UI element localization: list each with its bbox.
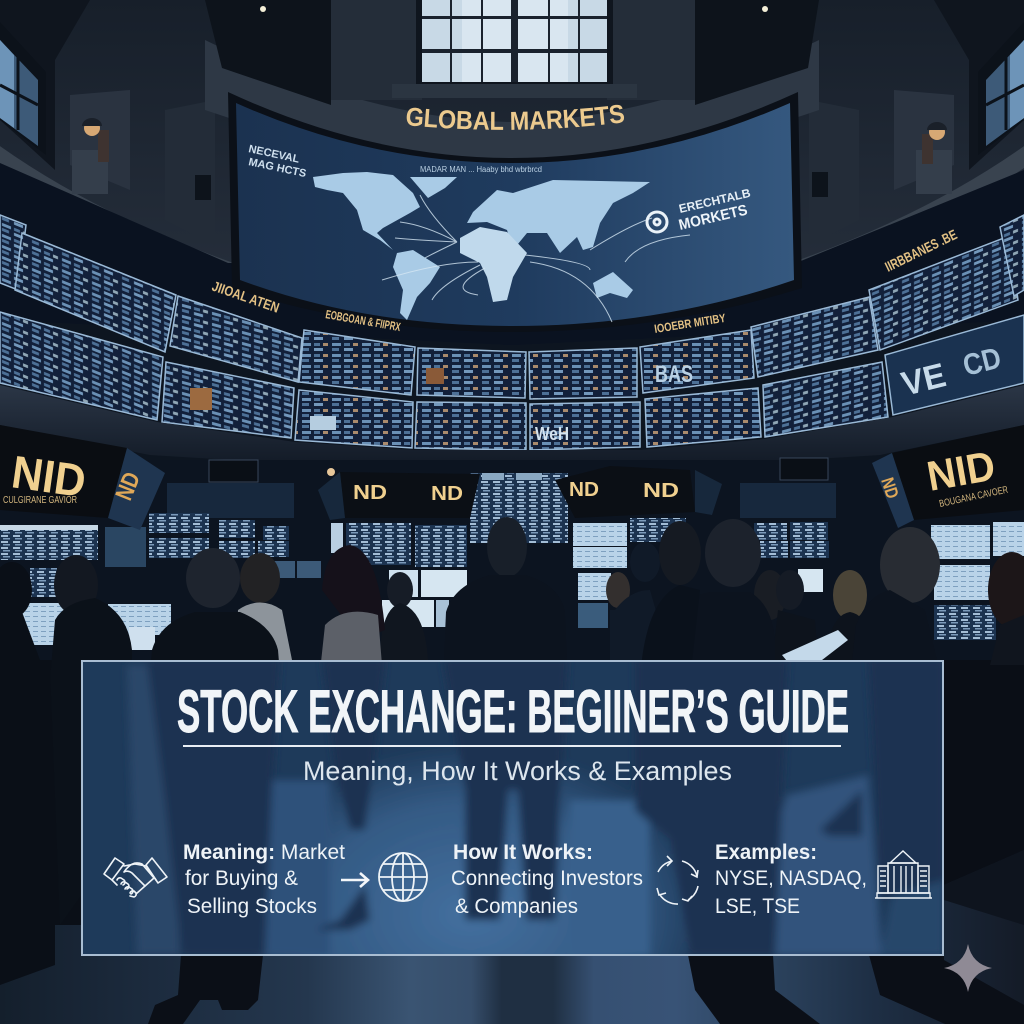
back wall panels xyxy=(167,483,836,518)
map connection lines xyxy=(382,195,690,322)
text: examples: LSE, TSE xyxy=(715,895,800,918)
screen label left 2: MAG HCTS xyxy=(247,156,307,180)
trading monitors wall xyxy=(0,473,1024,650)
side windows right xyxy=(978,22,1024,155)
hanging sign cluster left: ND xyxy=(431,483,463,505)
text: how it works xyxy=(451,841,643,918)
person: left man facing left xyxy=(50,555,132,925)
ticker board upper row xyxy=(0,215,1024,399)
wall lamp left xyxy=(72,118,109,194)
lit floor within panel xyxy=(128,664,942,954)
text: examples: Examples: xyxy=(715,841,817,864)
text: how it works: How It Works: xyxy=(453,841,593,864)
large sign right xyxy=(872,425,1024,528)
text: how it works: Connecting Investors xyxy=(451,867,643,890)
board labels in gold: JIIOAL ATEN xyxy=(210,278,281,316)
wall lamp right xyxy=(916,122,952,194)
large sign left: NID xyxy=(9,445,89,507)
map continents xyxy=(313,172,650,320)
text: meaning: for Buying & xyxy=(185,867,298,890)
back row people xyxy=(236,542,875,680)
ticker board lower row xyxy=(0,312,1024,450)
screen label right 2: MORKETS xyxy=(677,202,749,234)
soffit below boards xyxy=(0,385,1024,466)
text: how it works: & Companies xyxy=(455,895,578,918)
icon: globe xyxy=(379,853,427,901)
hanging sign cluster right: ND xyxy=(569,479,599,501)
person: man beside right man xyxy=(640,521,701,680)
legs and feet below panel xyxy=(148,955,1024,1024)
board labels in gold: IOOEBR MITIBY xyxy=(653,311,727,336)
speaker right xyxy=(812,172,828,197)
heading: global markets sign: GLOBAL MARKETS xyxy=(406,104,624,130)
hanging sign cluster left xyxy=(318,472,480,520)
skylight window xyxy=(392,0,637,98)
hanging sign cluster right xyxy=(555,466,722,518)
board logos: WeH xyxy=(535,424,569,444)
balcony right xyxy=(695,0,819,105)
title rule xyxy=(183,745,841,747)
board labels in gold: IIRBBANES .BE xyxy=(882,226,959,275)
person: woman in grey jacket xyxy=(318,545,385,690)
person: centre man back view xyxy=(443,517,568,680)
person: right man with glasses xyxy=(850,527,942,680)
hanging dark TVs xyxy=(209,458,828,482)
large sign right: ND xyxy=(877,475,902,501)
large sign left: ND xyxy=(110,468,146,504)
floor xyxy=(0,700,1024,1024)
arrow xyxy=(341,873,368,887)
icon: cycle xyxy=(657,856,698,904)
large sign left: CULGIRANE GAVIOR xyxy=(3,495,77,506)
speaker left xyxy=(195,175,211,200)
icon: sparkle watermark xyxy=(944,944,992,992)
text: examples: NYSE, NASDAQ, xyxy=(715,867,867,890)
board logos: BAS xyxy=(655,361,693,388)
screen label left: NECEVAL xyxy=(247,143,301,166)
right desk and figures (dark mass right of panel) xyxy=(944,552,1024,925)
text: meaning: Meaning: Market xyxy=(183,841,345,864)
panel: title overlay xyxy=(81,660,944,956)
large sign left xyxy=(0,425,165,530)
small lamp xyxy=(327,468,335,476)
text: meaning: Selling Stocks xyxy=(187,895,317,918)
hanging sign cluster right: ND xyxy=(643,480,679,502)
screen small text: MADAR MAN ... Haaby bhd wbrbrcd xyxy=(420,165,542,174)
heading: global markets sign xyxy=(406,104,624,130)
board labels in gold: EOBGOAN & FIIPRX xyxy=(324,307,402,334)
icon: exchange building xyxy=(875,851,932,898)
trading floor room background xyxy=(0,460,1024,700)
balcony left xyxy=(205,0,331,105)
text: examples xyxy=(715,841,867,918)
hanging sign cluster left: ND xyxy=(353,482,387,504)
subtitle: Meaning, How It Works & Examples xyxy=(303,756,732,786)
board logos: CD xyxy=(960,342,1005,383)
panel: big world map screen xyxy=(228,92,802,332)
large sign right: NID xyxy=(923,442,999,500)
icon: handshake xyxy=(104,858,167,897)
person: far left figures and table (dark mass left of panel) xyxy=(0,562,81,985)
board logos: VE xyxy=(898,356,950,404)
screen label right: ERECHTALB xyxy=(678,186,752,216)
tablet held by right person xyxy=(782,630,848,677)
text: meaning xyxy=(183,841,345,918)
ceiling lights xyxy=(260,6,768,12)
person: left man back view xyxy=(147,548,282,700)
screen target icon xyxy=(647,212,667,232)
board logos xyxy=(190,342,1005,444)
board labels in gold xyxy=(210,226,959,336)
side windows left xyxy=(0,22,46,155)
person: right man xyxy=(665,519,775,680)
dark band behind ticker boards xyxy=(0,163,1024,345)
